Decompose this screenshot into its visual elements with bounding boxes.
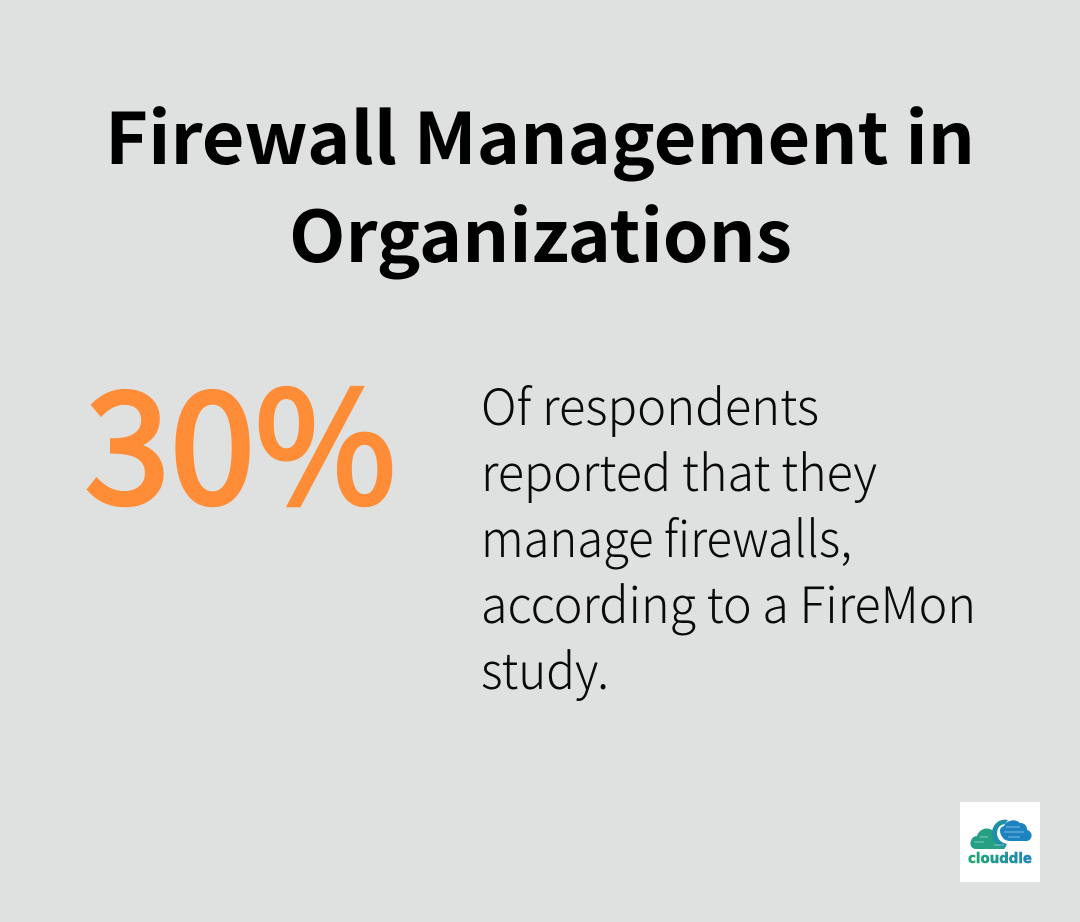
description text: Of respondents xyxy=(481,368,819,440)
description text: reported that they xyxy=(481,434,877,506)
logo: clouddle xyxy=(960,802,1040,882)
icon: middle crescent xyxy=(992,820,1008,848)
icon: right cloud xyxy=(1000,820,1032,841)
description text xyxy=(481,368,976,704)
title xyxy=(105,83,975,283)
description text: manage firewalls, xyxy=(481,500,852,572)
icon: circuit lines xyxy=(974,827,1024,845)
description text: according to a FireMon xyxy=(481,566,976,638)
wordmark: clouddle xyxy=(968,851,1032,867)
icon: left cloud xyxy=(970,828,1005,849)
title: Firewall Management in xyxy=(105,83,975,185)
title: Organizations xyxy=(289,181,792,283)
big stat: 30%: 30% xyxy=(85,325,396,548)
description text: study. xyxy=(481,632,609,704)
